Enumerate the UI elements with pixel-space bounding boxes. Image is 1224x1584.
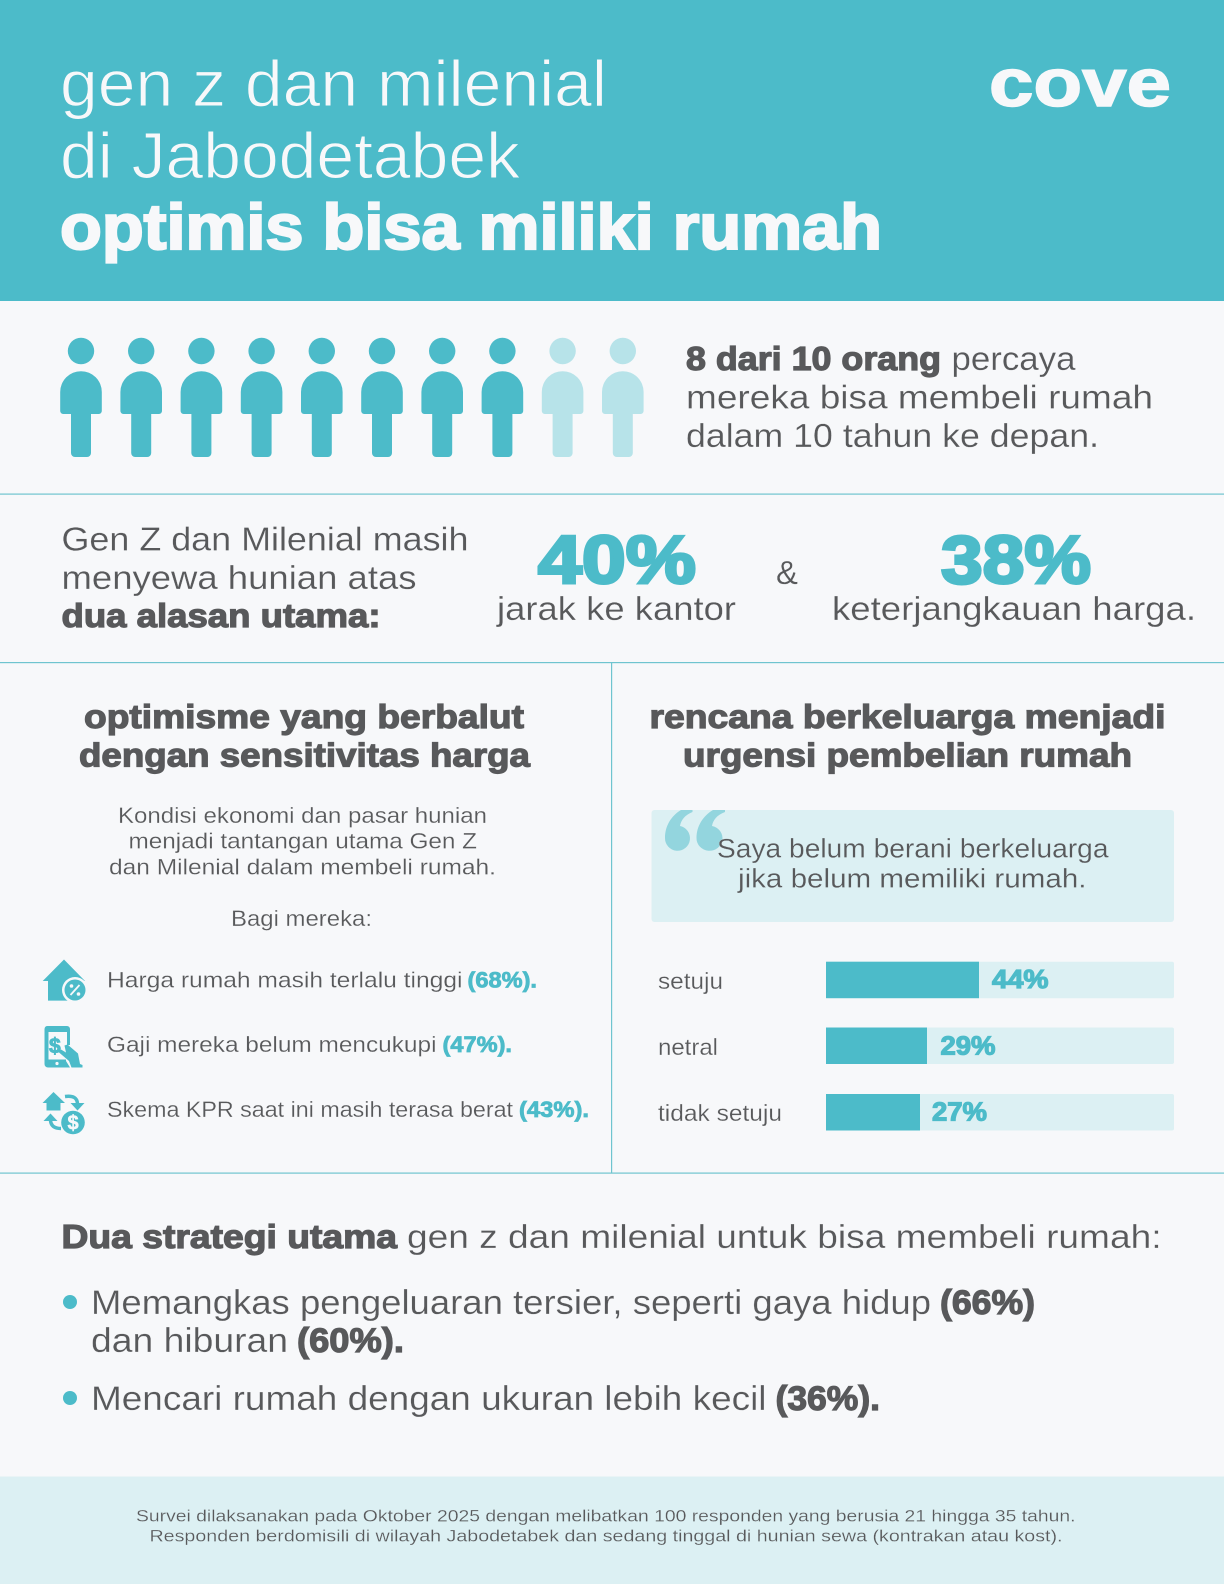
stat: 40% — [496, 522, 736, 627]
bar: netral 29% — [658, 1028, 1174, 1064]
title: gen z dan milenial — [60, 47, 607, 120]
pictogram: 10 people — [60, 338, 644, 457]
list item: mortgage — [42, 1092, 589, 1134]
heading: rencana berkeluarga menjadi — [650, 698, 1166, 735]
panel: price sensitivity — [42, 698, 589, 1134]
logo: cove: cove — [989, 45, 1171, 121]
heading: dengan sensitivitas harga — [79, 736, 531, 774]
bar: tidak setuju 27%: tidak setuju — [658, 1100, 782, 1126]
heading — [79, 698, 531, 774]
bullet: cut tertiary spending: (66%) — [940, 1284, 1035, 1322]
bar: setuju 44% — [658, 962, 1174, 998]
icon: house with percent — [43, 960, 88, 1003]
stat text: dalam 10 tahun ke depan. — [686, 417, 1099, 454]
paragraph — [109, 803, 496, 931]
lead text — [62, 520, 468, 634]
footer panel — [0, 1476, 1224, 1584]
list item: mortgage: (43%). — [519, 1097, 589, 1122]
list item: salary: (47%). — [442, 1032, 512, 1057]
header panel — [0, 0, 1224, 301]
list item: price: Harga rumah masih terlalu tinggi — [107, 968, 462, 992]
heading: Dua strategi utama — [62, 1218, 398, 1255]
bullet: smaller house: Mencari rumah dengan ukuran lebih kecil — [91, 1380, 766, 1418]
lead text: Gen Z dan Milenial masih — [62, 520, 468, 558]
title: optimis bisa miliki rumah — [60, 191, 882, 263]
stat text: 8 dari 10 orang — [686, 340, 941, 377]
lead text: dua alasan utama: — [62, 597, 380, 634]
list item: price: (68%). — [468, 968, 537, 992]
paragraph: dan Milenial dalam membeli rumah. — [109, 854, 496, 880]
paragraph: Kondisi ekonomi dan pasar hunian — [118, 803, 487, 828]
panel: two strategies — [62, 1218, 1162, 1418]
icon: phone with dollar and hand — [44, 1026, 82, 1068]
title: di Jabodetabek — [60, 119, 521, 192]
panel: family plans — [650, 698, 1174, 1130]
heading: gen z dan milenial untuk bisa membeli rumah: — [407, 1218, 1162, 1255]
bar: netral 29%: netral — [658, 1034, 718, 1060]
survey note: Survei dilaksanakan pada Oktober 2025 dengan melibatkan 100 responden yang berusia 21 hingga 35 tahun. — [136, 1506, 1076, 1526]
paragraph: menjadi tantangan utama Gen Z — [128, 828, 477, 854]
panel: two main reasons — [62, 520, 1196, 634]
stat: 40%: jarak ke kantor — [496, 590, 736, 627]
heading — [62, 1218, 1162, 1255]
ampersand: & — [776, 554, 798, 591]
panel: 8 of 10 people — [60, 338, 1153, 457]
bullet: cut tertiary spending: dan hiburan — [91, 1322, 288, 1360]
list item: salary — [44, 1026, 512, 1068]
survey note: Responden berdomisili di wilayah Jabodetabek dan sedang tinggal di hunian sewa (kontrakan atau kost). — [150, 1526, 1062, 1546]
paragraph: Bagi mereka: — [231, 906, 372, 931]
icon: house, arrows and dollar — [42, 1092, 85, 1134]
bar chart — [658, 962, 1174, 1130]
bullet: cut tertiary spending: (60%). — [297, 1322, 404, 1360]
quote box: Saya belum berani berkeluarga — [717, 834, 1109, 864]
quote box — [652, 810, 1174, 922]
heading: urgensi pembelian rumah — [683, 736, 1132, 774]
stat text: percaya — [952, 340, 1076, 377]
heading: optimisme yang berbalut — [84, 698, 524, 735]
bullet: cut tertiary spending — [63, 1284, 1035, 1360]
icon: phone with dollar and hand: $ — [49, 1035, 61, 1058]
bar: setuju 44%: 44% — [992, 964, 1048, 994]
icon: house, arrows and dollar: $ — [67, 1112, 79, 1134]
stat: 38% — [832, 522, 1196, 627]
icon: quotation mark — [665, 810, 725, 851]
title — [60, 47, 882, 263]
stat: 38%: keterjangkauan harga. — [832, 590, 1196, 627]
lead text: menyewa hunian atas — [62, 559, 416, 596]
bar: netral 29%: 29% — [940, 1030, 996, 1060]
heading — [650, 698, 1166, 774]
stat: 38%: 38% — [941, 522, 1091, 598]
survey note — [136, 1506, 1076, 1546]
bullet: cut tertiary spending: Memangkas pengeluaran tersier, seperti gaya hidup — [91, 1284, 931, 1322]
stat text: mereka bisa membeli rumah — [686, 378, 1153, 416]
bar: setuju 44%: setuju — [658, 968, 723, 994]
bullet: smaller house: (36%). — [776, 1380, 880, 1418]
list item: mortgage: Skema KPR saat ini masih terasa berat — [107, 1097, 514, 1122]
stat: 40%: 40% — [538, 522, 696, 598]
list item: price — [43, 960, 537, 1003]
bar: tidak setuju 27%: 27% — [932, 1096, 987, 1126]
bar: tidak setuju 27% — [658, 1094, 1174, 1130]
quote box: jika belum memiliki rumah. — [737, 864, 1086, 894]
list item: salary: Gaji mereka belum mencukupi — [107, 1032, 436, 1057]
stat text — [686, 340, 1153, 454]
